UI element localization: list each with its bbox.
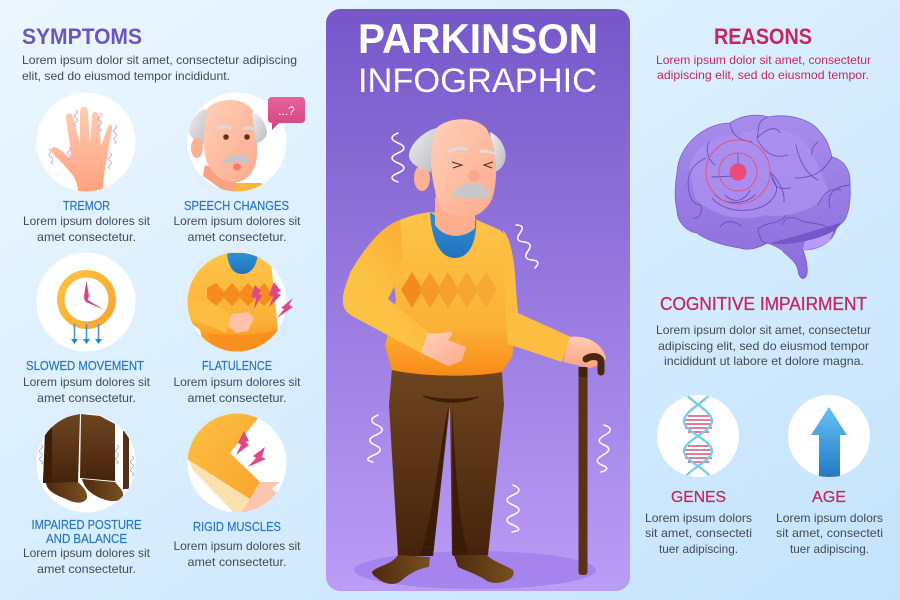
text: genes description: tuer adipiscing. [659, 542, 738, 556]
text: slowed movement description [23, 375, 151, 405]
label: flatulence: FLATULENCE [202, 359, 272, 373]
symptom: speech changes [188, 92, 305, 192]
text: rigid muscles description: amet consectetur. [188, 555, 286, 569]
label: genes: GENES [671, 489, 726, 506]
heading: reasons: REASONS [714, 24, 812, 49]
argyle pattern [401, 272, 497, 308]
head [409, 119, 506, 217]
symptoms intro text [22, 53, 297, 83]
reasons text [656, 53, 871, 82]
reason: genes [657, 395, 739, 477]
text: rigid muscles description: Lorem ipsum dolores sit [174, 539, 301, 553]
label: speech changes: SPEECH CHANGES [184, 199, 289, 213]
title [358, 15, 598, 100]
neck [435, 197, 475, 236]
icon: DNA helix [684, 390, 712, 482]
symptom: impaired posture and balance [36, 414, 136, 512]
symptom: slowed movement [36, 252, 136, 352]
text: speech changes description [174, 214, 301, 244]
text: flatulence description: amet consectetur. [188, 391, 286, 405]
title: INFOGRAPHIC [358, 62, 597, 100]
cognitive impairment text [656, 323, 871, 368]
brain folds [688, 117, 850, 243]
text: flatulence description [174, 375, 301, 405]
target rings [706, 140, 770, 204]
reason: age [788, 395, 870, 477]
icon: clock with arrows [61, 274, 112, 344]
label: impaired posture and balance: AND BALANCE [46, 532, 127, 546]
symptom: rigid muscles [188, 414, 286, 512]
panel: symptoms [22, 24, 305, 576]
title: PARKINSON [358, 15, 598, 62]
text: posture description [23, 546, 151, 576]
icon: brain with target [675, 115, 850, 279]
text: genes description [645, 511, 752, 556]
text: tremor description: amet consectetur. [37, 230, 136, 244]
icon: shaking hand [49, 106, 116, 192]
symptoms intro text: elit, sed do eiusmod tempor incididunt. [22, 69, 230, 83]
nose [468, 170, 480, 182]
hand on cane [563, 337, 606, 368]
label: impaired posture and balance: IMPAIRED POSTURE [32, 518, 142, 532]
text: slowed movement description: amet consectetur. [37, 391, 136, 405]
cognitive impairment text: Lorem ipsum dolor sit amet, consectetur [656, 323, 871, 337]
panel: central figure [326, 9, 630, 591]
icon: speech bubble: ...? [278, 104, 295, 118]
symptom: flatulence [187, 252, 293, 352]
cognitive impairment text: adipiscing elit, sed do eiusmod tempor [658, 339, 869, 353]
cane [578, 367, 588, 575]
illustration: elderly man with cane [343, 119, 610, 584]
text: slowed movement description: Lorem ipsum dolores sit [23, 375, 151, 389]
left arm [343, 220, 432, 354]
text: genes description: Lorem ipsum dolors [645, 511, 752, 525]
text: age description: Lorem ipsum dolors [776, 511, 883, 525]
text: genes description: sit amet, consecteti [645, 526, 752, 540]
floor shadow [354, 551, 596, 589]
cane handle [586, 357, 601, 372]
label: age: AGE [812, 489, 846, 506]
reasons text: Lorem ipsum dolor sit amet, consectetur [656, 53, 871, 67]
label: slowed movement: SLOWED MOVEMENT [26, 359, 144, 373]
label: tremor: TREMOR [63, 199, 110, 213]
hand on stomach [421, 332, 466, 366]
icon: bent arm with lightning [188, 414, 280, 512]
heading: symptoms: SYMPTOMS [22, 24, 142, 49]
text: rigid muscles description [174, 539, 301, 569]
icon: legs with cane [40, 414, 134, 503]
text: tremor description: Lorem ipsum dolores sit [23, 214, 151, 228]
trousers [389, 368, 504, 556]
eyebrows [448, 147, 468, 153]
label: rigid muscles: RIGID MUSCLES [193, 520, 281, 534]
icon: up arrow [811, 407, 847, 477]
text: flatulence description: Lorem ipsum dolores sit [174, 375, 301, 389]
text: tremor description [23, 214, 151, 244]
squinting eyes [452, 162, 493, 168]
text: age description: tuer adipiscing. [790, 542, 869, 556]
symptoms intro text: Lorem ipsum dolor sit amet, consectetur adipiscing [22, 53, 297, 67]
icon: sweater with stomach pain [187, 252, 293, 352]
text: speech changes description: amet consectetur. [188, 230, 286, 244]
reasons text: adipiscing elit, sed do eiusmod tempor. [657, 68, 869, 82]
cognitive impairment text: incididunt ut labore et dolore magna. [664, 354, 864, 368]
shoes [372, 555, 514, 584]
text: age description: sit amet, consecteti [776, 526, 883, 540]
heading: cognitive impairment: COGNITIVE IMPAIRMENT [660, 294, 867, 314]
text: posture description: Lorem ipsum dolores sit [23, 546, 151, 560]
text: speech changes description: Lorem ipsum dolores sit [174, 214, 301, 228]
moustache [453, 183, 490, 198]
right sleeve [503, 230, 571, 362]
text: age description [776, 511, 883, 556]
sweater hem [386, 342, 512, 376]
panel: reasons [645, 24, 883, 556]
tremor squiggles [368, 133, 610, 532]
symptom: tremor [36, 92, 136, 192]
blue shirt collar [430, 212, 476, 258]
label: impaired posture and balance [32, 518, 142, 546]
text: posture description: amet consectetur. [37, 562, 136, 576]
sweater body [385, 212, 518, 376]
